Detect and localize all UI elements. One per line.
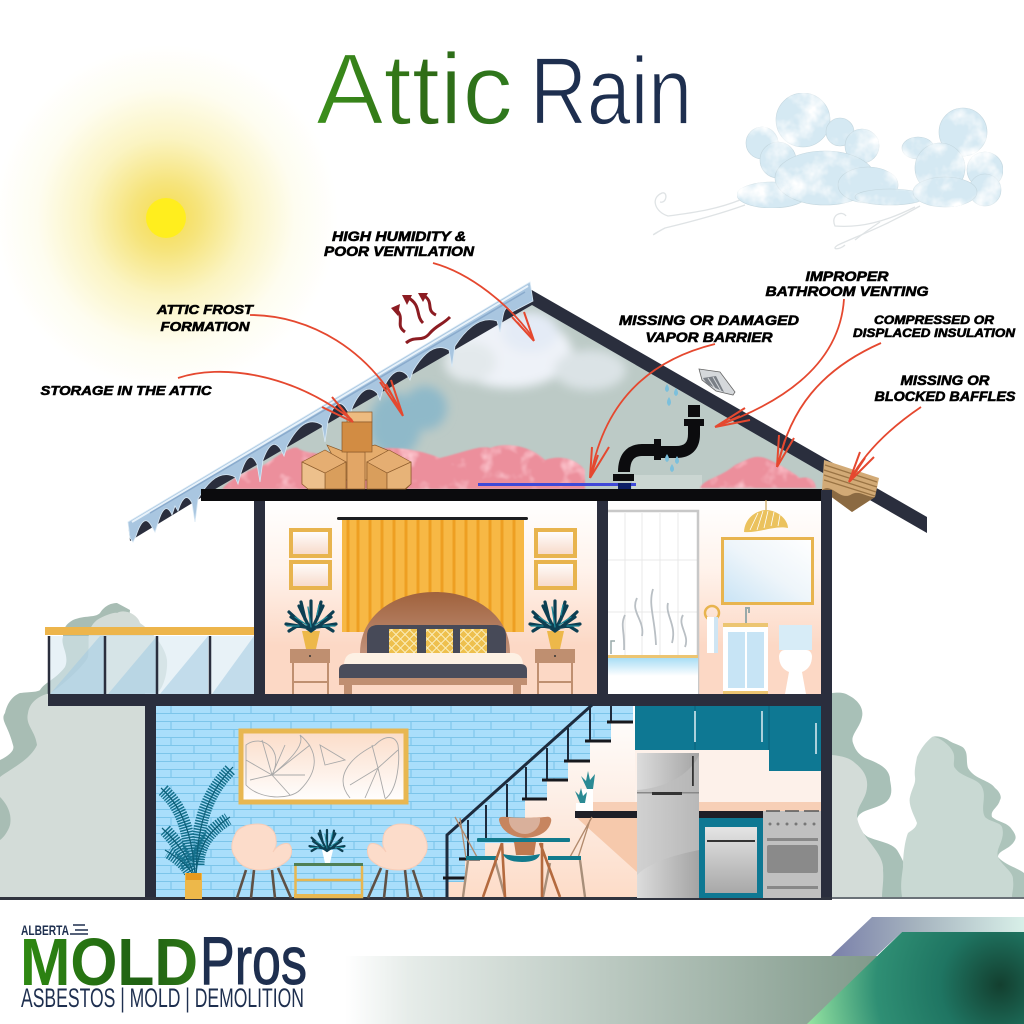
label: humidity <box>324 229 474 259</box>
house structure <box>0 490 832 900</box>
side table and plant <box>294 830 363 898</box>
sun <box>0 45 338 389</box>
label: baffles: BLOCKED BAFFLES <box>874 389 1016 404</box>
curtain <box>337 517 528 632</box>
label: frost <box>156 302 254 334</box>
attic air space <box>205 303 824 490</box>
right armchair <box>367 824 427 898</box>
left armchair <box>232 824 292 898</box>
table legs <box>483 843 560 897</box>
label: baffles: MISSING OR <box>900 373 990 388</box>
vanity <box>723 608 768 694</box>
label: humidity: HIGH HUMIDITY & <box>332 229 466 244</box>
arrow: insulation <box>777 343 881 467</box>
label: bathroom <box>766 269 929 299</box>
arrow: storage <box>178 372 353 422</box>
panel: kitchen <box>455 706 821 898</box>
pink insulation left <box>222 445 585 489</box>
arrow: vapor barrier <box>590 344 715 478</box>
title: Attic <box>316 34 513 146</box>
arrows <box>178 263 921 482</box>
label: vapor barrier: MISSING OR DAMAGED <box>619 313 799 328</box>
icon: cloud and wind <box>654 93 1003 249</box>
icon: cardboard boxes <box>302 412 411 489</box>
pendant lamp <box>744 500 788 532</box>
side chairs <box>455 817 592 858</box>
palm plant <box>161 767 233 899</box>
logo: ASBESTOS | MOLD | DEMOLITION <box>21 983 304 1013</box>
toilet <box>779 625 812 694</box>
arrow: frost <box>250 315 403 416</box>
attic floor strip <box>632 475 702 489</box>
counter <box>575 811 763 818</box>
icon: roof vent <box>699 369 735 395</box>
roof <box>128 282 927 542</box>
label: insulation <box>853 313 1015 340</box>
shower <box>608 511 699 694</box>
frost patch <box>369 386 447 457</box>
mirror <box>722 538 812 604</box>
icicles and ice <box>128 282 533 542</box>
title <box>316 34 692 146</box>
footer band <box>345 917 1024 1024</box>
panel: living room <box>156 706 637 899</box>
right nightstand and plant <box>530 601 580 694</box>
panel: attic <box>205 303 824 490</box>
bushes <box>0 603 1024 899</box>
label: frost: FORMATION <box>160 319 250 334</box>
picture frames <box>291 530 575 588</box>
label: frost: ATTIC FROST <box>156 302 254 317</box>
icon: attic floor beam <box>201 489 832 501</box>
label: baffles <box>874 373 1016 404</box>
staircase wall <box>447 706 637 897</box>
label: bathroom: IMPROPER <box>806 269 889 284</box>
icon: heat waves <box>391 293 450 343</box>
kitchen wall shadow <box>577 818 637 872</box>
logo: ALBERTA <box>21 922 69 938</box>
arrow: bathroom vent <box>715 299 844 427</box>
left nightstand and plant <box>286 601 336 694</box>
icon: water droplets <box>665 384 679 472</box>
arrow: baffles <box>849 407 921 482</box>
cabinets <box>635 706 821 771</box>
icon: vent pipe <box>613 405 704 481</box>
painting <box>241 731 406 802</box>
dishwasher <box>699 818 763 898</box>
attic mist <box>444 312 626 390</box>
icon: baffle wood <box>822 460 879 512</box>
panel: balcony <box>45 627 254 694</box>
dining set <box>455 817 592 897</box>
vapor barrier <box>478 483 636 489</box>
logo <box>20 922 307 1013</box>
towel <box>705 606 719 653</box>
label: vapor barrier: VAPOR BARRIER <box>646 330 773 345</box>
staircase railing <box>443 705 633 897</box>
label: insulation: COMPRESSED OR <box>874 313 994 327</box>
title: Rain <box>530 38 692 145</box>
label: storage: STORAGE IN THE ATTIC <box>40 383 212 398</box>
steam <box>623 589 686 650</box>
stove <box>763 811 821 898</box>
label: insulation: DISPLACED INSULATION <box>853 326 1015 340</box>
shelf plants <box>575 771 595 811</box>
label: vapor barrier <box>619 313 799 345</box>
panel: bathroom <box>608 500 821 694</box>
fridge <box>637 753 699 898</box>
labels <box>40 229 1016 404</box>
logo: MOLD <box>20 925 198 1000</box>
centre chair <box>514 842 536 855</box>
label: humidity: POOR VENTILATION <box>324 244 474 259</box>
logo: Pros <box>200 923 307 999</box>
bed <box>339 592 527 694</box>
pink insulation right <box>700 457 816 488</box>
label: bathroom: BATHROOM VENTING <box>766 284 929 299</box>
panel: bedroom <box>254 501 608 694</box>
arrow: humidity <box>433 263 534 341</box>
